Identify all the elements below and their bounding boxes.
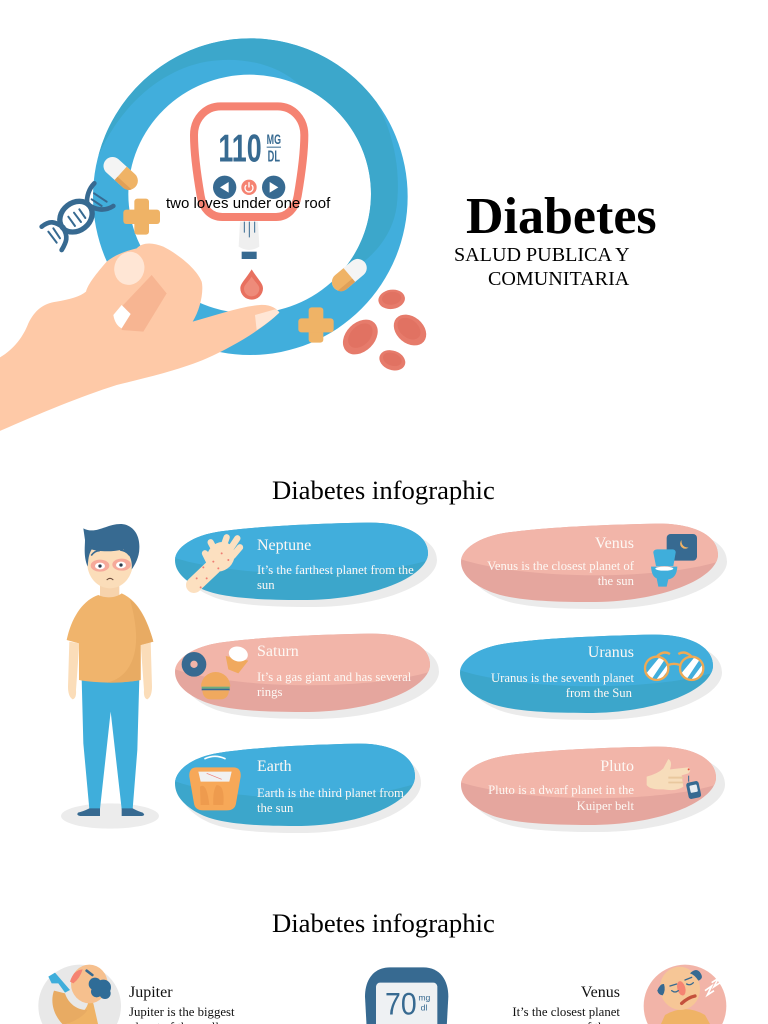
subtitle: SALUD PUBLICA Y [454,244,630,266]
title and text: Venus [595,535,634,552]
card shape [170,518,437,607]
title and text: rings [257,685,282,699]
card shape [170,739,421,833]
text block: Jupiter: Jupiter [129,984,173,1001]
title and text [487,535,635,588]
title and text: Earth is the third planet from [257,786,404,800]
text block: Jupiter: Jupiter is the biggest [129,1005,235,1019]
overlapping caption: two loves under one roof [166,195,331,212]
red blood cells [336,288,432,374]
card shape [455,630,722,720]
blood drop [240,269,263,300]
capsule right [328,255,370,295]
card: Pluto [456,742,725,832]
title: Diabetes [466,188,657,245]
icon: weight scale [189,756,241,810]
icon: toilet at night [651,534,697,587]
glucose meter: MG [267,131,281,147]
card: Venus [456,519,727,609]
heading: section one: Diabetes infographic [272,475,495,505]
icon: glasses [645,652,706,682]
icon: junk food [182,644,250,699]
title and text: It’s the farthest planet from the [257,563,414,577]
card: Neptune [170,518,437,607]
title and text: sun [257,578,275,592]
heading: section two: Diabetes infographic [272,908,495,938]
title and text: Pluto is a dwarf planet in the [488,783,634,797]
plus right [298,307,334,343]
text block: Venus: It’s the closest planet [512,1005,620,1019]
title and text: Uranus [588,644,634,661]
hero illustration: glucose meter and hand [0,38,432,432]
DNA helix [42,183,113,250]
card shape [456,742,725,832]
title and text: Pluto [600,758,634,775]
icon: glucose meter 70: mg [418,993,431,1003]
text block: Venus [512,984,620,1024]
icon: man drinking water [38,965,121,1024]
title and text [491,644,634,700]
icon: hand with rash [194,536,240,588]
title and text: Earth [257,758,292,775]
plus left [123,199,160,235]
glucose meter [194,106,304,217]
icon: glucose meter 70: dl [421,1003,427,1013]
title and text: Neptune [257,537,311,554]
person figure [61,524,159,829]
hand [0,243,279,432]
title and text [257,643,412,699]
card shape [456,519,727,609]
card: Saturn [170,629,439,719]
title and text [257,758,404,815]
title and text: Saturn [257,643,299,660]
icon: glucose meter 70: 70 [385,986,417,1021]
test strip [239,222,259,259]
title and text: Kuiper belt [577,799,634,813]
card: Earth [170,739,421,833]
subtitle [454,244,630,290]
icon: finger prick [647,759,702,799]
title and text [488,758,634,813]
icon: sleeping man [644,964,726,1024]
title and text: It’s a gas giant and has several [257,670,412,684]
title and text: from the Sun [566,686,633,700]
card shape [170,629,439,719]
title and text: the sun [598,574,635,588]
glucose meter: 110 [218,127,262,171]
title and text: the sun [257,801,294,815]
text block: Jupiter [129,984,235,1024]
text block: Venus: Venus [581,984,620,1001]
capsule left [100,153,142,193]
card: Uranus [455,630,722,720]
title and text: Venus is the closest planet of [487,559,635,573]
icon: glucose meter 70 [365,967,448,1024]
title and text: Uranus is the seventh planet [491,671,634,685]
subtitle: COMUNITARIA [488,268,630,290]
title and text [257,537,414,592]
glucose meter: DL [268,148,280,165]
blue ring [93,38,408,355]
